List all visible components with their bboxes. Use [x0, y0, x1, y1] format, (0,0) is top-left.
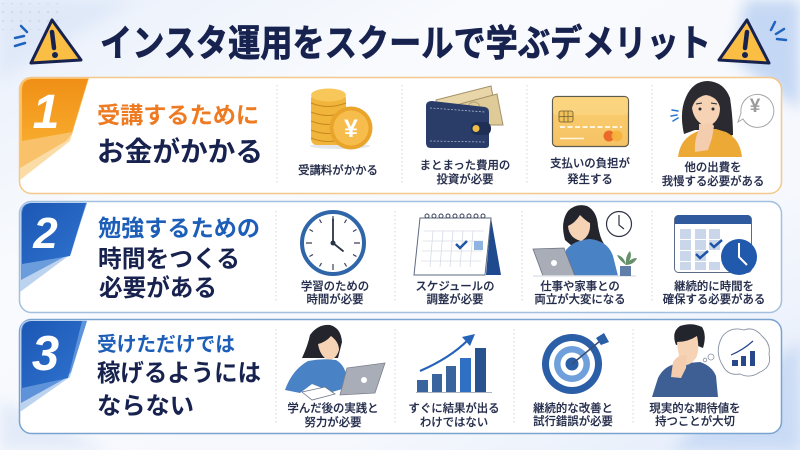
icon: warning left [15, 20, 81, 63]
badge 1: 1 [33, 86, 59, 139]
heading 2: 時間をつくる [98, 246, 240, 273]
caption [301, 279, 369, 306]
icon: clock [302, 212, 364, 274]
panel 1: cost [20, 78, 782, 194]
icon: desk calendar [414, 214, 501, 275]
caption: 受講料がかかる [298, 163, 378, 177]
icon: growth chart [416, 334, 492, 392]
caption [663, 279, 765, 306]
heading 2: 必要がある [99, 274, 217, 302]
title: インスタ運用をスクールで学ぶデメリット [100, 22, 711, 64]
caption [533, 401, 613, 428]
icon: woman studying [285, 325, 385, 400]
panel 3: results [20, 320, 782, 434]
badge 2 [20, 202, 87, 292]
caption: 両立が大変になる [534, 292, 626, 306]
caption [550, 156, 630, 186]
badge 3: 3 [32, 327, 59, 381]
heading 2: 勉強するための [98, 215, 260, 241]
badge 3 [20, 320, 87, 412]
caption: 現実的な期待値を [649, 401, 741, 415]
caption: 仕事や家事との [540, 279, 620, 293]
caption: 継続的に時間を [674, 279, 754, 293]
icon: worried woman [671, 81, 742, 157]
caption: 時間が必要 [307, 292, 363, 306]
icon: thinking man [652, 324, 718, 397]
caption: 支払いの負担が [550, 156, 630, 170]
badge 1 [20, 78, 89, 180]
caption: わけではない [420, 416, 488, 429]
icon: warning right [719, 20, 786, 63]
heading 1: お金がかかる [97, 136, 263, 167]
icon: wallet [426, 86, 503, 148]
caption [662, 160, 764, 188]
heading 3: 受けただけでは [97, 333, 235, 356]
panel 2: time [20, 202, 782, 312]
caption [416, 280, 494, 306]
heading 3: 稼げるようには [97, 360, 261, 387]
caption [534, 279, 626, 306]
icon: yen speech bubble [738, 94, 774, 127]
icon: coins: ¥ [344, 115, 358, 143]
caption [287, 401, 379, 429]
caption: 学習のための [301, 279, 369, 293]
caption: 学んだ後の実践と [287, 401, 379, 415]
caption: 継続的な改善と [533, 401, 613, 415]
icon: calendar with clock [674, 215, 757, 275]
icon: credit card [552, 96, 628, 146]
caption: 持つことが大切 [655, 414, 735, 428]
icon: small clock [606, 212, 632, 236]
icon: target [542, 333, 609, 394]
caption: 我慢する必要がある [662, 174, 764, 188]
caption: 努力が必要 [305, 415, 361, 429]
badge 2: 2 [32, 209, 58, 258]
icon: yen speech bubble: ¥ [750, 96, 761, 117]
heading 3: ならない [97, 393, 194, 420]
caption: スケジュールの [416, 280, 494, 293]
caption: 発生する [567, 172, 613, 186]
caption: 確保する必要がある [663, 292, 765, 306]
icon: thought bubble [718, 329, 770, 376]
caption: 試行錯誤が必要 [533, 414, 613, 428]
heading 1: 受講するために [97, 102, 259, 128]
heading 2 [98, 215, 260, 302]
caption [420, 158, 510, 186]
caption: 投資が必要 [437, 172, 493, 186]
icon: coins [310, 88, 372, 150]
icon: woman at laptop [533, 205, 637, 276]
caption: 調整が必要 [427, 292, 483, 306]
caption: すぐに結果が出る [408, 401, 500, 415]
heading 1 [97, 102, 263, 167]
caption: 他の出費を [685, 160, 741, 174]
caption [408, 401, 500, 429]
caption [649, 401, 741, 428]
heading 3 [97, 333, 261, 420]
caption: まとまった費用の [420, 158, 510, 172]
